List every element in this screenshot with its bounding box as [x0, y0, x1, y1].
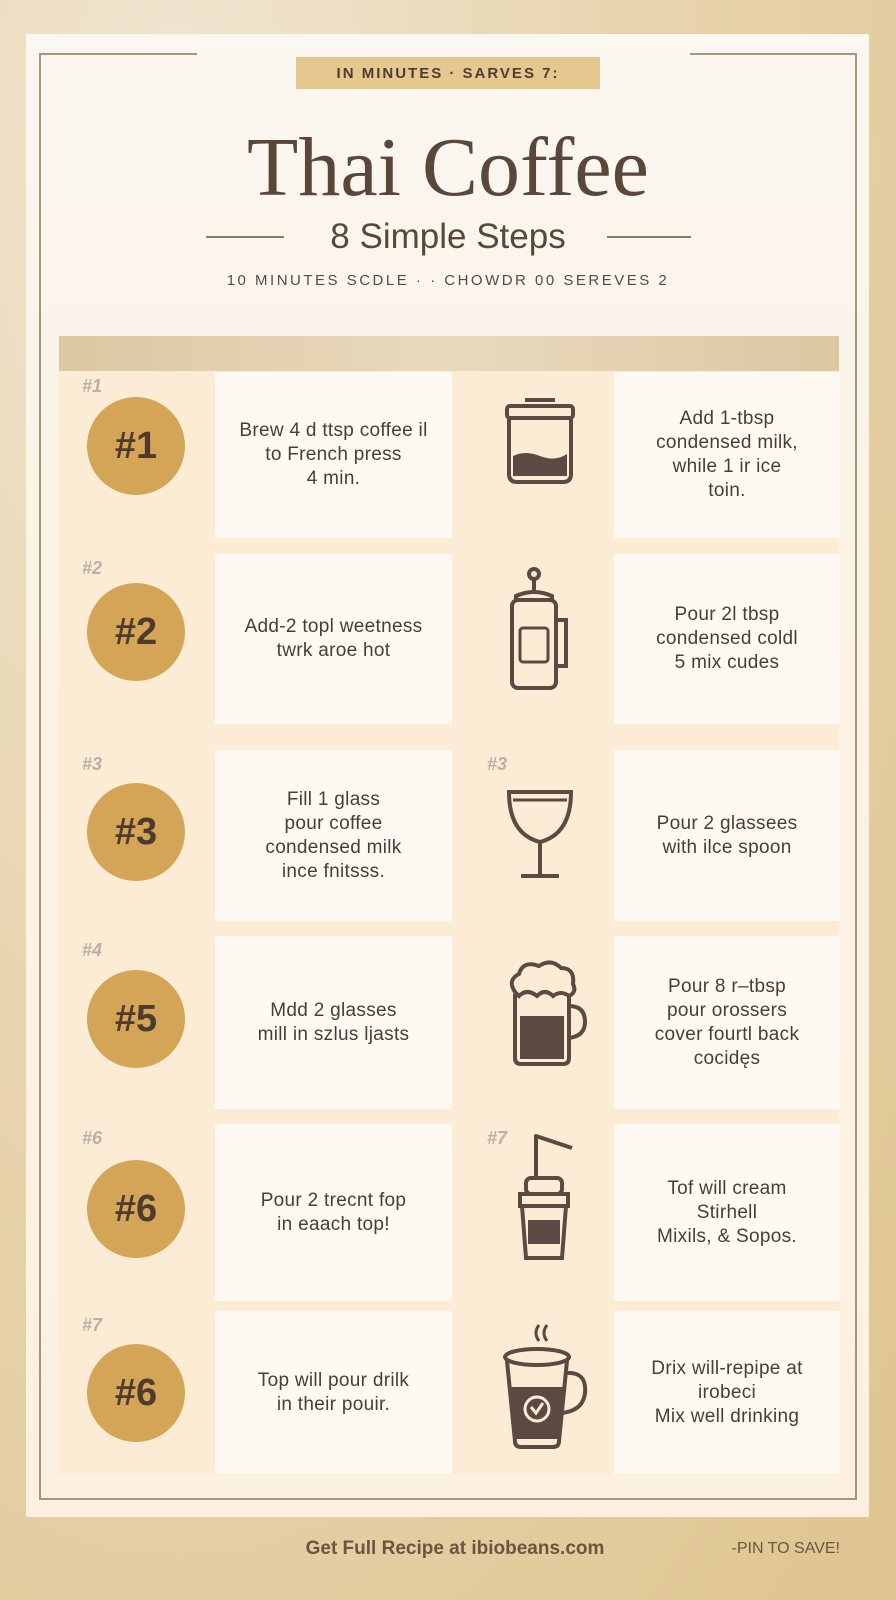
label: #1 [82, 376, 102, 396]
text [614, 1311, 840, 1474]
step row 6: #7 [82, 1315, 102, 1335]
icon: hot mug [503, 1324, 588, 1449]
text [215, 750, 452, 921]
step row 2 [82, 554, 840, 724]
text: Pour 2l tbsp [674, 604, 779, 625]
circle 6: #6 [115, 1188, 157, 1230]
text: Mdd 2 glasses [270, 1000, 397, 1020]
circle 1 [87, 397, 185, 495]
text: with ilce spoon [662, 836, 792, 858]
text: cocidęs [694, 1048, 760, 1068]
text: 4 min. [307, 468, 360, 489]
label right: #3 [487, 754, 507, 774]
icon: french press [510, 567, 568, 690]
text: Add-2 topl weetness [245, 616, 422, 637]
footer: pin: -PIN TO SAVE! [732, 1540, 840, 1557]
text: Top will pour drilk [258, 1370, 409, 1390]
text: Mix well drinking [655, 1406, 799, 1426]
icon: frothy mug [510, 960, 587, 1066]
text: Pour 2 glassees [657, 812, 797, 834]
text: Tof will cream [667, 1178, 787, 1198]
badge [296, 57, 600, 89]
text: mill in szlus ljasts [258, 1024, 409, 1044]
step row 1 [82, 372, 840, 538]
step row 5 [82, 1124, 840, 1301]
circle 2 [87, 583, 185, 681]
text: pour coffee [284, 812, 383, 834]
text: to French press [265, 444, 402, 465]
text [614, 372, 840, 538]
step row 6 [82, 1311, 840, 1474]
title: Thai Coffee [247, 121, 649, 214]
text: while 1 ir ice [673, 456, 781, 477]
text: condensed milk, [656, 432, 798, 453]
text: ince fnitsss. [282, 860, 385, 882]
text: Stirhell [697, 1202, 757, 1222]
step row 3: #3 [82, 754, 102, 774]
text: Brew 4 d ttsp coffee il [239, 420, 428, 441]
text [215, 554, 452, 724]
steps grid [59, 371, 839, 1474]
step row 2: #2 [82, 558, 102, 578]
text: irobeci [698, 1382, 756, 1402]
circle 2: #2 [115, 610, 157, 652]
text: toin. [708, 480, 746, 501]
subtitle: 8 Simple Steps [330, 217, 566, 256]
text: 5 mix cudes [675, 652, 779, 673]
circle 6 [87, 1160, 185, 1258]
circle 5: #5 [115, 998, 157, 1040]
step row 4 [82, 936, 840, 1109]
text [215, 372, 452, 538]
step row 3 [82, 750, 840, 921]
footer: recipe link: Get Full Recipe at ibiobeans.com [306, 1538, 604, 1559]
text [614, 1124, 840, 1301]
text [215, 1311, 452, 1474]
step row 5: #6 [82, 1128, 102, 1148]
meta line: 10 MINUTES SCDLE · · CHOWDR 00 SEREVES 2 [227, 272, 669, 289]
header bar [59, 336, 839, 371]
circle 6 [87, 1344, 185, 1442]
text: Add 1-tbsp [680, 408, 774, 429]
circle 6: #6 [115, 1372, 157, 1414]
text: Fill 1 glass [287, 788, 380, 810]
icon: glass [507, 790, 573, 878]
text [215, 936, 452, 1109]
text [614, 554, 840, 724]
step row 4: #4 [82, 940, 102, 960]
text: condensed coldl [656, 628, 798, 649]
text: pour orossers [667, 1000, 787, 1020]
text: cover fourtl back [655, 1024, 799, 1044]
text: twrk aroe hot [277, 640, 390, 661]
text: Drix will-repipe at [651, 1358, 803, 1378]
text: Pour 2 trecnt fop [261, 1190, 406, 1210]
circle 3 [87, 783, 185, 881]
circle 3: #3 [115, 810, 157, 852]
text: condensed milk [265, 836, 402, 858]
text [614, 750, 840, 921]
text: in eaach top! [277, 1214, 390, 1234]
step row 5: #7 [487, 1128, 507, 1148]
badge: IN MINUTES · SARVES 7: [337, 64, 559, 82]
text [614, 936, 840, 1109]
text [215, 1124, 452, 1301]
circle 5 [87, 970, 185, 1068]
text: Pour 8 r–tbsp [668, 976, 786, 996]
icon: jar [505, 398, 575, 484]
circle 1: #1 [115, 424, 157, 466]
text: Mixils, & Sopos. [657, 1226, 797, 1246]
text: in their pouir. [277, 1394, 390, 1414]
icon: cup with straw [518, 1134, 573, 1260]
